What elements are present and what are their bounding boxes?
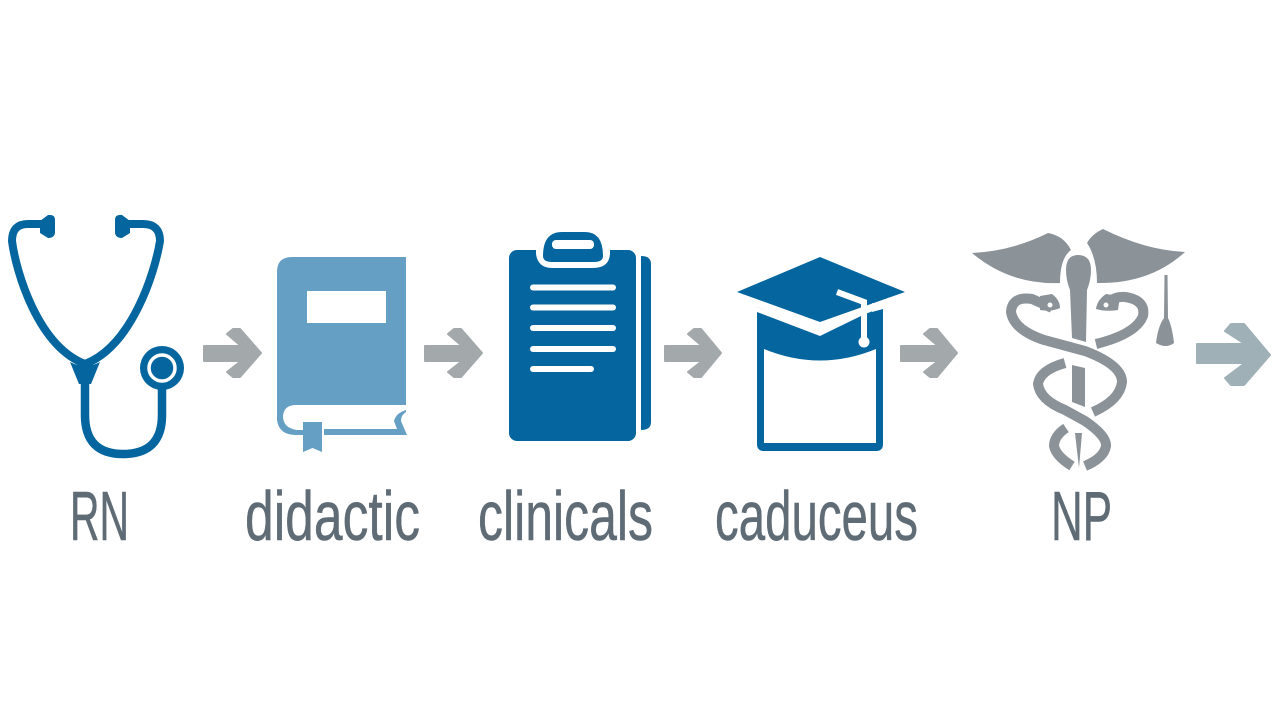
needle tassel	[1156, 275, 1174, 346]
label: clinicals: clinicals	[478, 477, 653, 555]
cap tassel	[837, 292, 870, 348]
arrow 4	[901, 329, 957, 377]
snake one	[1011, 297, 1143, 466]
right wing	[1087, 229, 1185, 283]
clipboard clip	[536, 232, 610, 268]
snake heads	[1040, 294, 1060, 311]
arrow 2	[425, 329, 482, 377]
label: caduceus: caduceus	[715, 477, 918, 555]
arrow 1	[204, 329, 261, 377]
icon: bookmark	[303, 422, 322, 452]
label: RN: RN	[70, 477, 129, 555]
icon: book	[277, 257, 407, 452]
label: NP: NP	[1051, 477, 1112, 555]
left wing	[972, 233, 1071, 283]
label: didactic: didactic	[245, 477, 420, 555]
arrow 3	[665, 329, 721, 377]
arrow 5	[1197, 324, 1270, 385]
icon: stethoscope	[12, 215, 184, 454]
icon: clipboard	[509, 232, 651, 441]
staff	[1066, 255, 1091, 342]
snake two	[1096, 297, 1143, 344]
icon: caduceus	[972, 229, 1185, 468]
icon: graduation cap	[737, 257, 905, 451]
